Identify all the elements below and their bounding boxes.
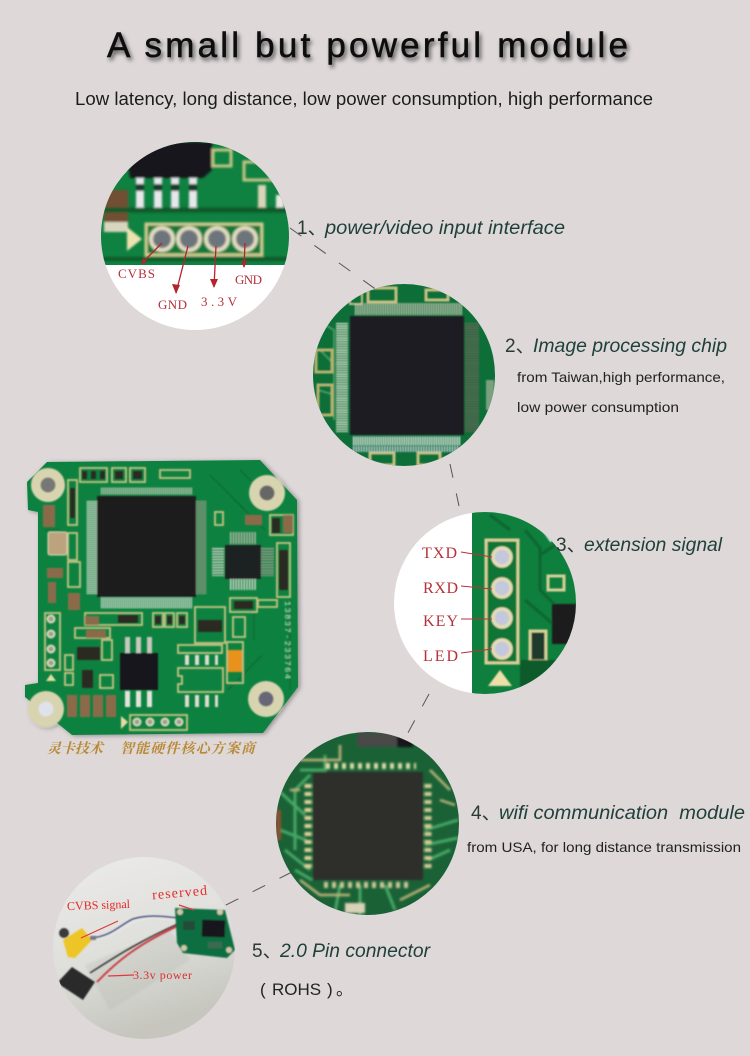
yellow jack (59, 928, 96, 958)
board serial number: 13837-233764 (282, 601, 292, 679)
label 4 with description: wifi communication module (499, 803, 745, 824)
main processor chip (92, 491, 201, 603)
label 5 with note: 。 (336, 980, 353, 999)
label 4 with description: from USA, for long distance transmission (467, 839, 741, 855)
panel: main module photo (25, 460, 298, 735)
label 1: 1、 (297, 218, 327, 239)
red pointer arrows (81, 905, 194, 976)
mounting holes (28, 468, 285, 727)
label 4 with description (467, 803, 745, 855)
callout: pin labels of circle 1: 3.3V (201, 294, 238, 309)
callout: pin labels of circle 1: GND (158, 297, 187, 312)
panel: circle 5 wired connection photo: reserved (152, 884, 208, 903)
soft shadows (85, 930, 190, 1010)
label 1: power/video input interface (324, 218, 565, 239)
small chip pins (185, 655, 218, 665)
caption under module (47, 740, 258, 757)
caption under module: 灵卡技术 (47, 741, 105, 757)
label 3: 3、 (556, 535, 586, 556)
subtitle: Low latency, long distance, low power consumption, high performance (75, 89, 653, 109)
label 5 with note: ROHS (272, 980, 321, 999)
panel: circle 5 wired connection photo: 3.3v power (133, 968, 192, 982)
secondary chip (218, 538, 267, 584)
solder frames and components (45, 468, 293, 730)
callout: pin labels of circle 1: CVBS (118, 266, 155, 281)
callout: pin labels of circle 3: RXD (423, 580, 458, 597)
panel: circle 5 wired connection photo: CVBS signal (67, 897, 131, 913)
label 2 with description: Image processing chip (533, 336, 727, 357)
orange capacitor (228, 650, 242, 672)
label 2 with description: 2、 (505, 336, 535, 357)
label 2 with description: low power consumption (517, 399, 679, 415)
panel: circle 5 wired connection photo (52, 856, 236, 1040)
callout: pin labels of circle 3: KEY (423, 613, 458, 630)
dashed connector lines (222, 228, 459, 907)
label 3: extension signal (584, 535, 723, 556)
label 5 with note: ) (327, 980, 333, 999)
label 5 with note (252, 941, 431, 999)
label 4 with description: 4、 (471, 803, 501, 824)
title: A small but powerful module (107, 26, 628, 65)
callout: pin labels of circle 1: GND (235, 272, 262, 287)
callout: pin labels of circle 3: TXD (422, 545, 457, 562)
label 2 with description (505, 336, 727, 415)
panel: circle 4 wifi module closeup (275, 731, 461, 917)
third chip (120, 645, 158, 699)
side and bottom connector pads (48, 616, 182, 726)
small module (175, 908, 235, 958)
caption under module: 智能硬件核心方案商 (120, 740, 258, 757)
panel: circle 1 power/video interface closeup (100, 142, 290, 335)
callout: pin labels of circle 1 (118, 266, 262, 312)
callout: pin labels of circle 3: LED (423, 648, 458, 665)
label 5 with note: 2.0 Pin connector (279, 941, 431, 962)
panel: circle 3 extension signal closeup (393, 504, 576, 700)
label 2 with description: from Taiwan,high performance, (517, 369, 725, 385)
black plug (57, 967, 95, 1000)
crystal (48, 532, 67, 555)
label 5 with note: 5、 (252, 941, 282, 962)
wires (90, 916, 180, 982)
panel: circle 2 image processing chip closeup (312, 283, 496, 467)
callout: pin labels of circle 3 (422, 545, 458, 665)
label 5 with note: ( (260, 980, 266, 999)
